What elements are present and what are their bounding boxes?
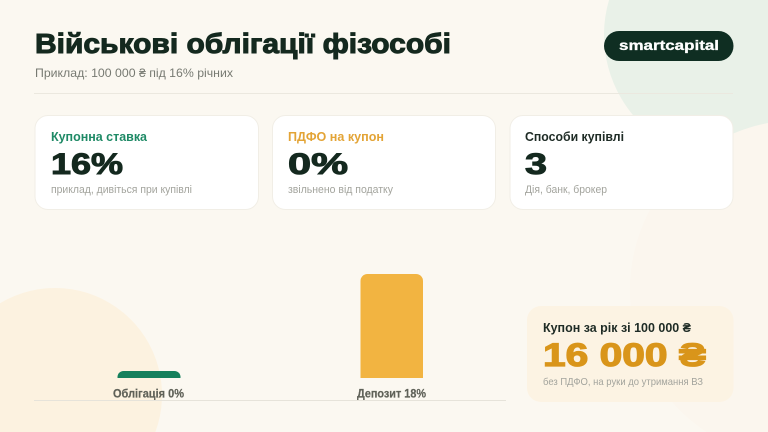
panel: ways to buy [510, 116, 733, 210]
ways label: Способи купівлі [525, 129, 624, 144]
panel: income tax on coupon [272, 116, 496, 210]
logo badge: smartcapital [619, 37, 719, 53]
subtitle: Приклад: 100 000 ₴ під 16% річних [35, 66, 233, 80]
bar: deposit 18%: Депозит 18% [357, 388, 426, 400]
coupon rate label: Купонна ставка [51, 129, 148, 144]
tax value: 0% [288, 148, 348, 181]
panel: coupon rate [35, 116, 258, 210]
bar: bond 0% [113, 371, 184, 400]
callout value: 16 000 ₴ [543, 337, 706, 373]
tax note: звільнено від податку [288, 184, 393, 196]
coupon rate note: приклад, дивіться при купівлі [51, 184, 192, 196]
callout: annual coupon [527, 306, 734, 402]
logo badge [604, 31, 734, 61]
bar: deposit 18% [357, 274, 426, 400]
title: Військові облігації фізособі [35, 28, 451, 59]
coupon rate value: 16% [51, 148, 123, 181]
ways note: Дія, банк, брокер [525, 184, 607, 196]
bar: bond 0%: Облігація 0% [113, 388, 184, 400]
callout label: Купон за рік зі 100 000 ₴ [543, 321, 692, 335]
tax label: ПДФО на купон [288, 129, 384, 144]
bar chart [34, 274, 506, 401]
callout note: без ПДФО, на руки до утримання ВЗ [543, 376, 703, 388]
ways value: 3 [525, 148, 547, 181]
